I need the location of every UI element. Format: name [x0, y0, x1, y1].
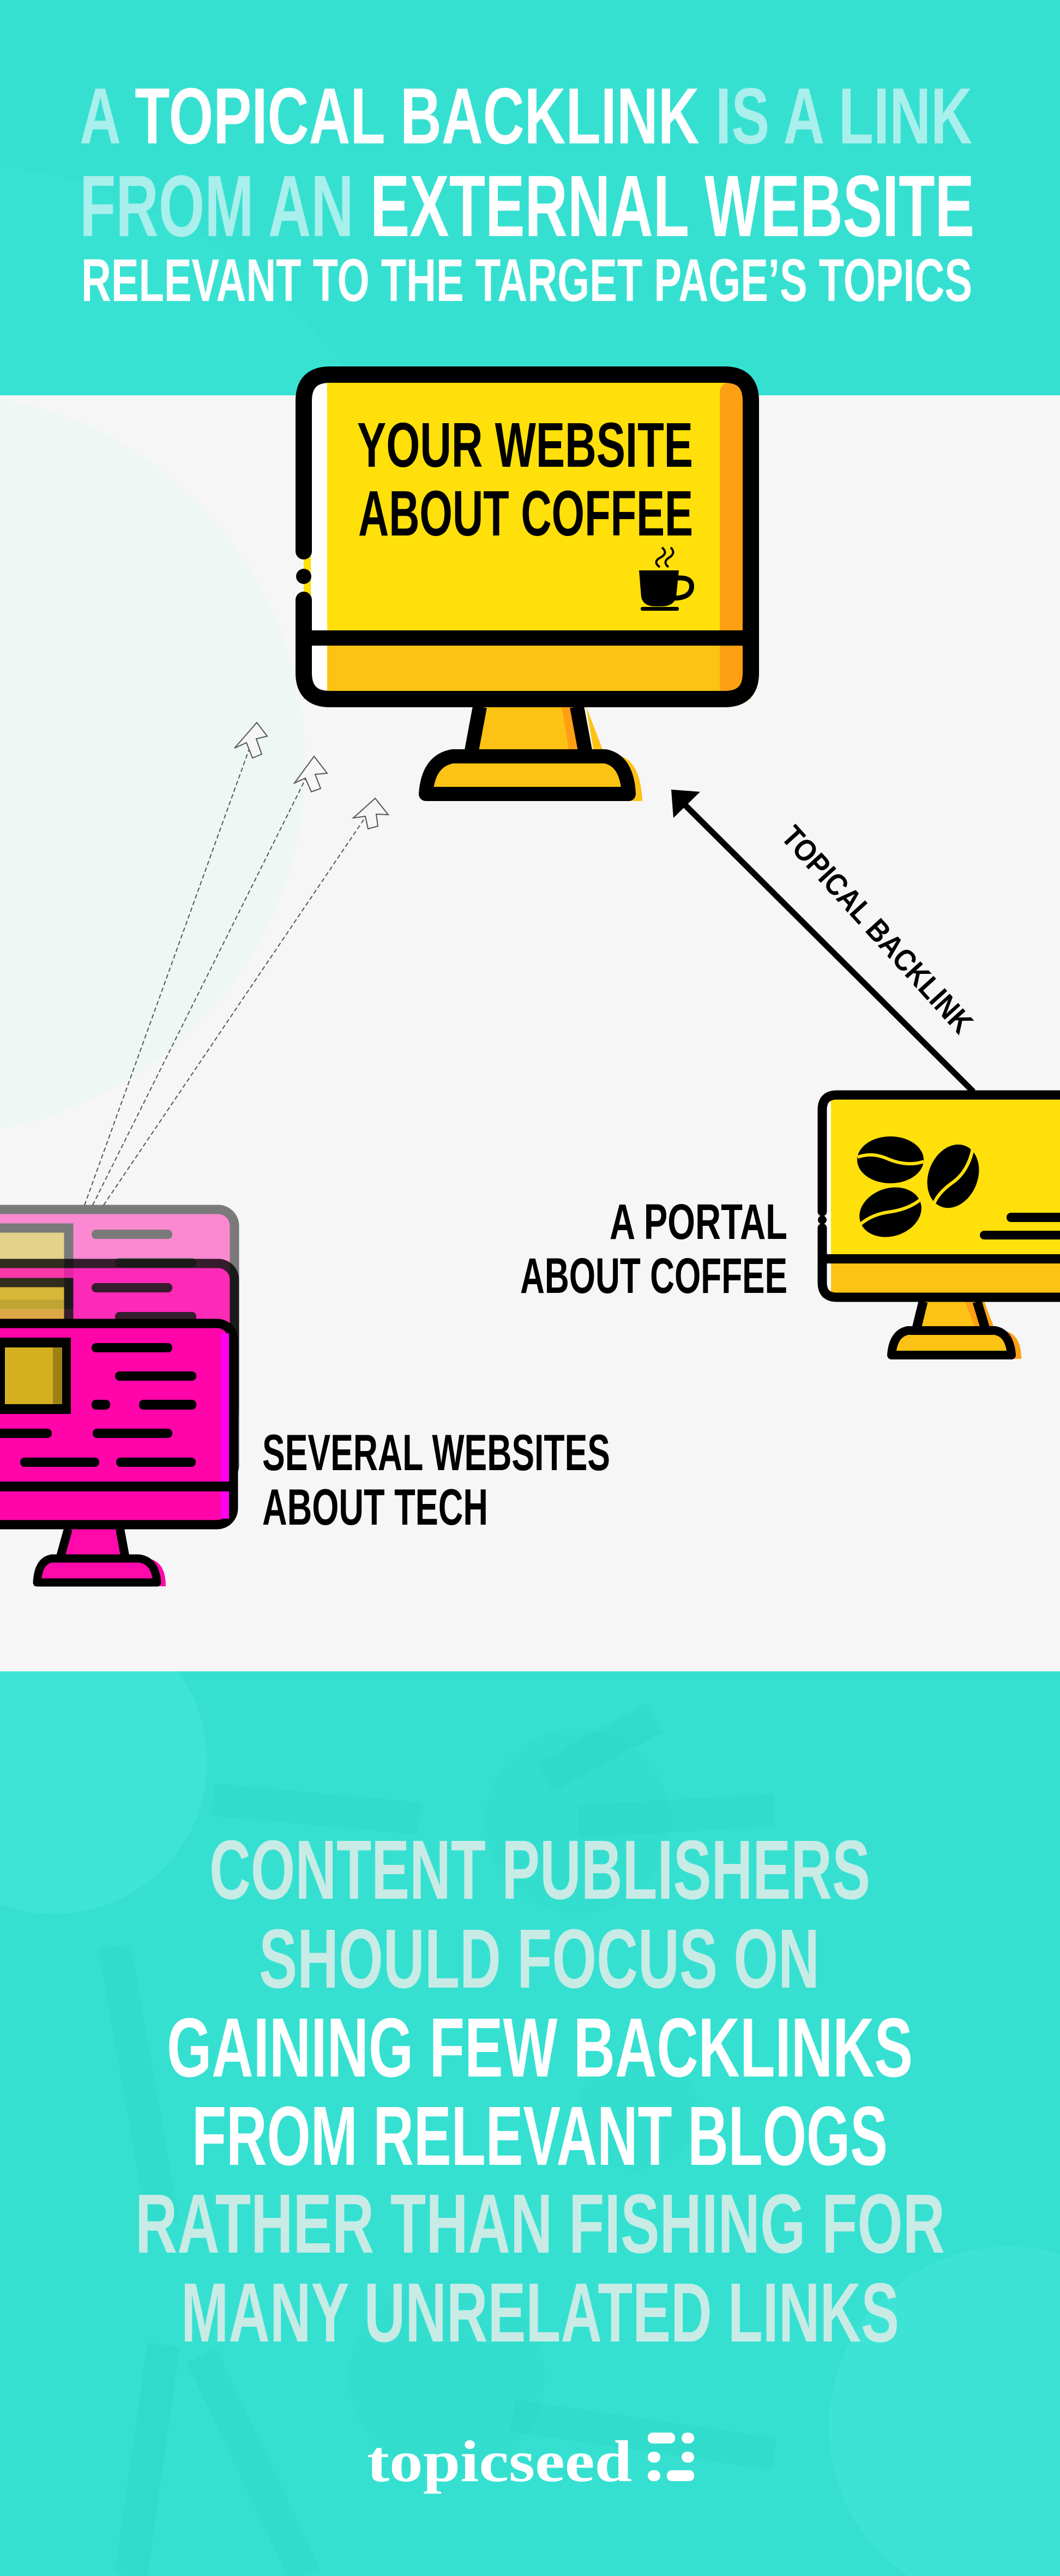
main monitor: your website about coffee	[296, 375, 751, 801]
bottom message: SHOULD FOCUS ON	[259, 1912, 820, 2006]
bottom message	[135, 1823, 945, 2360]
front monitor stand	[60, 1529, 125, 1558]
screen	[822, 1095, 1060, 1298]
header panel	[0, 0, 1060, 395]
dashed arrows from tech websites	[85, 723, 388, 1205]
title: A TOPICAL BACKLINK IS A LINK	[80, 71, 972, 160]
stand	[916, 1302, 986, 1331]
middle monitor	[0, 1263, 234, 1482]
screen text: YOUR WEBSITE	[357, 410, 693, 480]
back monitor	[0, 1209, 234, 1428]
tech monitors stack	[0, 1209, 234, 1586]
icon: coffee beans	[853, 1136, 988, 1245]
stand	[471, 707, 586, 756]
front monitor	[0, 1323, 233, 1525]
icon: coffee cup	[639, 547, 691, 611]
main monitor: your website about coffee: ABOUT COFFEE	[358, 478, 693, 550]
label: several websites about tech	[262, 1424, 610, 1536]
label: several websites about tech: ABOUT TECH	[262, 1478, 488, 1536]
title	[80, 71, 974, 314]
arrow label: TOPICAL BACKLINK	[775, 819, 980, 1040]
bottom panel background	[0, 1609, 1060, 2576]
label: a portal about coffee: A PORTAL	[610, 1194, 787, 1250]
logo: topicseed: topicseed	[367, 2429, 632, 2494]
label: a portal about coffee: ABOUT COFFEE	[520, 1248, 787, 1304]
screen frame	[304, 375, 751, 699]
arrow: topical backlink	[671, 790, 980, 1092]
label: a portal about coffee	[520, 1194, 787, 1304]
icon: logo grid	[648, 2433, 694, 2481]
label: several websites about tech: SEVERAL WEBSITES	[262, 1424, 610, 1481]
portal monitor	[818, 1095, 1060, 1359]
